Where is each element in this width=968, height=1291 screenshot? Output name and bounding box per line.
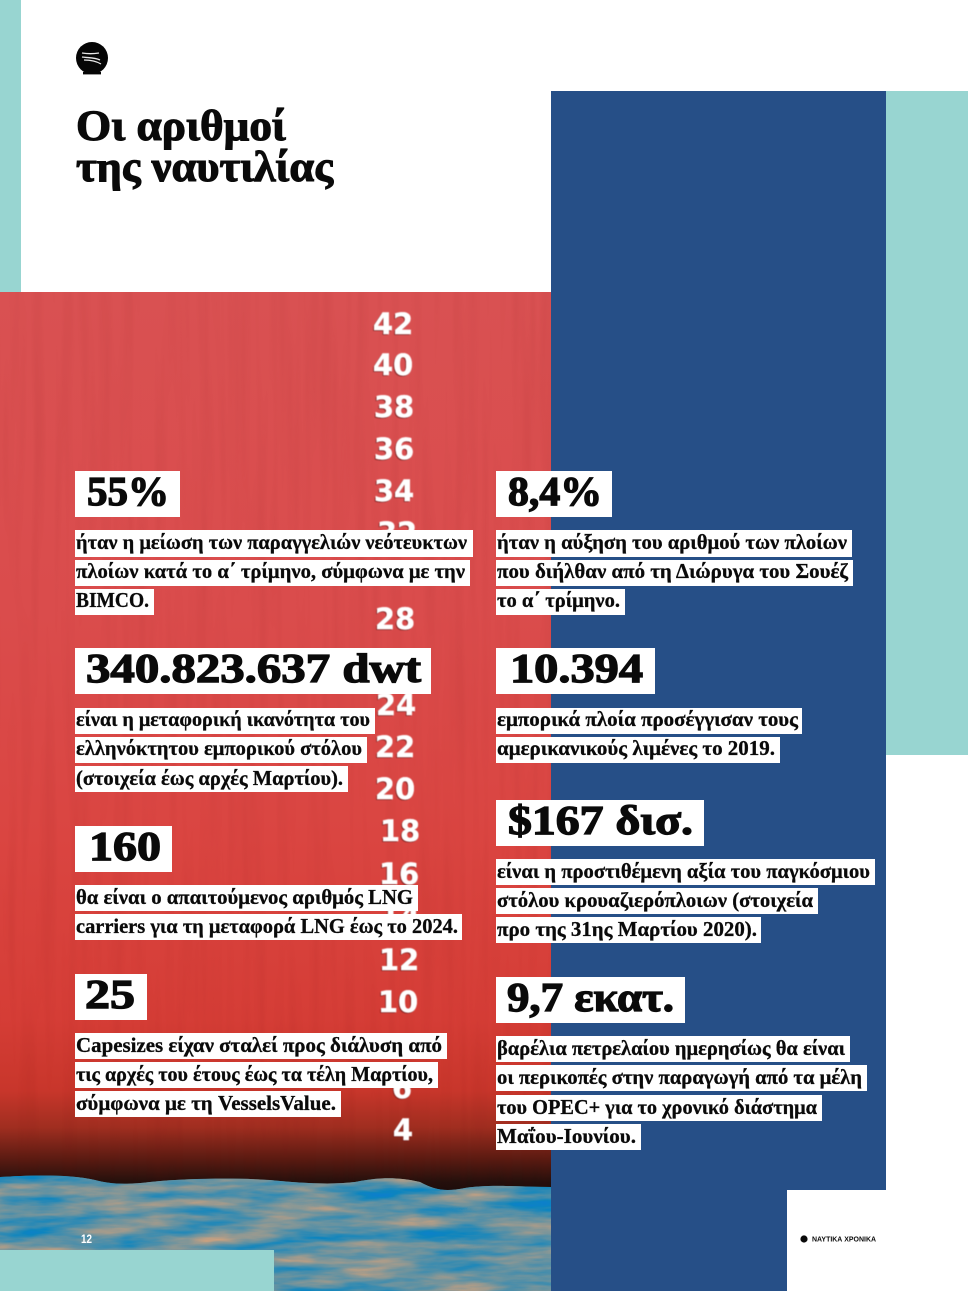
stat: 55%: ήταν η μείωση των παραγγελιών νεότευκτων xyxy=(76,530,468,554)
panel: teal strip top left xyxy=(0,0,21,292)
hull draught mark shadows: 12 xyxy=(378,944,418,978)
title xyxy=(76,103,334,191)
hull draught mark shadows: 42 xyxy=(372,308,412,342)
stat: 160: carriers για τη μεταφορά LNG έως το 2024. xyxy=(76,914,458,938)
stat: 9,7 εκατ.: του OPEC+ για το χρονικό διάστημα xyxy=(497,1095,817,1119)
hull draught marks: 24 xyxy=(376,688,416,722)
hull draught marks: 34 xyxy=(374,474,414,508)
stat: 9,7 εκατ.: 9,7 εκατ. xyxy=(507,974,674,1020)
icon: section emblem xyxy=(76,42,108,74)
hull draught marks: 38 xyxy=(374,390,414,424)
stat: 55%: πλοίων κατά το α΄ τρίμηνο, σύμφωνα με την xyxy=(76,559,466,583)
hull draught marks: 32 xyxy=(377,516,417,550)
stat: 10.394 xyxy=(496,645,802,763)
stat: 25: Capesizes είχαν σταλεί προς διάλυση από xyxy=(76,1033,442,1057)
hull draught marks: 20 xyxy=(375,772,415,806)
hull draught mark shadows xyxy=(372,308,419,1148)
stat: 340.823.637 dwt: (στοιχεία έως αρχές Μαρτίου). xyxy=(76,766,343,790)
stat: 8,4% xyxy=(496,468,853,615)
stat: $167 δισ. xyxy=(496,797,875,943)
stat: 55%: BIMCO. xyxy=(76,588,149,612)
hull draught marks xyxy=(373,307,420,1147)
stat: $167 δισ.: προ της 31ης Μαρτίου 2020). xyxy=(497,917,757,941)
hull draught marks: 4 xyxy=(393,1113,413,1147)
stat: 10.394: 10.394 xyxy=(510,645,643,691)
stat: 340.823.637 dwt xyxy=(75,645,431,792)
hull draught marks: 10 xyxy=(378,985,418,1019)
stat: $167 δισ.: είναι η προστιθέμενη αξία του παγκόσμιου xyxy=(497,859,870,883)
title: της ναυτιλίας xyxy=(76,144,334,191)
stat: 160: 160 xyxy=(89,823,161,869)
stat: $167 δισ.: $167 δισ. xyxy=(508,797,693,843)
hull draught marks: 28 xyxy=(375,602,415,636)
stat: 340.823.637 dwt: 340.823.637 dwt xyxy=(86,645,421,691)
hull draught mark shadows: 24 xyxy=(375,689,415,723)
stat: 25: 25 xyxy=(85,971,135,1017)
hull draught mark shadows: 14 xyxy=(379,900,419,934)
stat: 55% xyxy=(75,468,473,615)
hull draught mark shadows: 22 xyxy=(374,731,414,765)
stat: 9,7 εκατ.: Μαΐου-Ιουνίου. xyxy=(497,1124,636,1148)
hull draught mark shadows: 6 xyxy=(391,1072,411,1106)
hull draught mark shadows: 18 xyxy=(379,815,419,849)
hull draught mark shadows: 40 xyxy=(372,349,412,383)
stat: 25: σύμφωνα με τη VesselsValue. xyxy=(76,1091,336,1115)
panel: teal strip right xyxy=(886,91,968,755)
hull draught marks: 18 xyxy=(380,814,420,848)
hull draught marks: 40 xyxy=(373,348,413,382)
stat: 9,7 εκατ.: βαρέλια πετρελαίου ημερησίως θα είναι xyxy=(497,1036,845,1060)
hull draught marks: 36 xyxy=(374,432,414,466)
stat: 160: θα είναι ο απαιτούμενος αριθμός LNG xyxy=(76,885,413,909)
hull draught marks: 6 xyxy=(392,1071,412,1105)
stat: $167 δισ.: στόλου κρουαζιερόπλοιων (στοιχεία xyxy=(497,888,813,912)
hull draught marks: 12 xyxy=(379,943,419,977)
stat: 8,4%: ήταν η αύξηση του αριθμού των πλοίων xyxy=(497,530,848,554)
footer logo: ΝΑΥΤΙΚΑ ΧΡΟΝΙΚΑ xyxy=(812,1236,876,1244)
stat: 9,7 εκατ. xyxy=(496,974,867,1150)
hull draught marks: 16 xyxy=(379,857,419,891)
stat: 8,4%: το α΄ τρίμηνο. xyxy=(497,588,620,612)
panel: blue column xyxy=(551,91,886,1291)
stat: 8,4%: 8,4% xyxy=(508,468,602,514)
hull draught marks: 42 xyxy=(373,307,413,341)
stat: 8,4%: που διήλθαν από τη Διώρυγα του Σουέζ xyxy=(497,559,848,583)
hull draught mark shadows: 10 xyxy=(377,986,417,1020)
hull draught mark shadows: 28 xyxy=(374,603,414,637)
hull draught mark shadows: 4 xyxy=(392,1114,412,1148)
stat: 340.823.637 dwt: ελληνόκτητου εμπορικού στόλου xyxy=(76,736,362,760)
hull draught marks: 14 xyxy=(380,899,420,933)
stat: 55%: 55% xyxy=(87,468,169,514)
sea surface xyxy=(0,1170,551,1291)
stat: 10.394: εμπορικά πλοία προσέγγισαν τους xyxy=(497,707,799,731)
page number: 12 xyxy=(81,1234,92,1246)
stat: 25 xyxy=(75,971,447,1117)
stat: 25: τις αρχές του έτους έως τα τέλη Μαρτίου, xyxy=(76,1062,433,1086)
hull draught marks: 22 xyxy=(375,730,415,764)
panel: teal block bottom left xyxy=(0,1250,274,1291)
stat: 340.823.637 dwt: είναι η μεταφορική ικανότητα του xyxy=(76,707,370,731)
hull draught mark shadows: 38 xyxy=(373,391,413,425)
hull draught mark shadows: 16 xyxy=(378,858,418,892)
stat: 9,7 εκατ.: οι περικοπές στην παραγωγή από τα μέλη xyxy=(497,1065,862,1089)
hull draught mark shadows: 36 xyxy=(373,433,413,467)
hull draught mark shadows: 32 xyxy=(376,517,416,551)
hull draught mark shadows: 34 xyxy=(373,475,413,509)
hull draught mark shadows: 20 xyxy=(374,773,414,807)
stat: 10.394: αμερικανικούς λιμένες το 2019. xyxy=(497,736,775,760)
title: Οι αριθμοί xyxy=(76,103,286,150)
panel: ship hull photo xyxy=(0,292,551,1291)
stat: 160 xyxy=(75,823,462,940)
